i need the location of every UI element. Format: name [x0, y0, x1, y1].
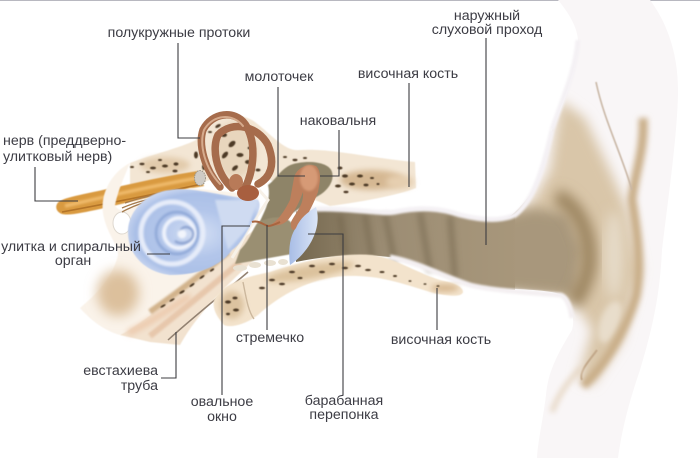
label: external auditory canal: слуховой проход: [432, 22, 543, 38]
tympanic cavity: [232, 162, 333, 271]
Eustachian tube: [120, 225, 278, 345]
label: incus: [300, 113, 376, 176]
label: external auditory canal: наружный: [454, 8, 520, 24]
ear canal: [296, 40, 578, 318]
label: oval window: [191, 226, 253, 425]
label: stapes: стремечко: [236, 330, 304, 346]
label: upper temporal bone: височная кость: [358, 66, 458, 82]
label: nerve: улитковый нерв): [3, 149, 112, 165]
label: cochlea: орган: [55, 253, 91, 269]
label: malleus: молоточек: [245, 69, 314, 85]
label: semicircular canals: [108, 25, 250, 138]
label: cochlea: [1, 239, 170, 269]
semicircular canals: [201, 115, 272, 201]
label: lower temporal bone: [391, 288, 491, 348]
stapes: [252, 221, 280, 226]
label: upper temporal bone: [358, 66, 458, 187]
label: Eustachian tube: труба: [121, 378, 158, 394]
label: lower temporal bone: височная кость: [391, 332, 491, 348]
label: oval window: окно: [207, 409, 237, 425]
lower-left bone mass: [80, 163, 258, 335]
label: oval window: овальное: [191, 394, 253, 410]
nerve (vestibulocochlear): [56, 170, 205, 215]
outer ear (pinna): [512, 0, 678, 458]
nerve fibres fan: [122, 192, 228, 212]
label: tympanic membrane: перепонка: [309, 407, 379, 423]
tympanic membrane: [289, 207, 318, 265]
bone speckle texture: [130, 123, 440, 315]
label: tympanic membrane: барабанная: [305, 393, 383, 409]
cochlea and spiral organ: [128, 189, 260, 275]
label: tympanic membrane: [305, 234, 383, 423]
top edge scan line: [0, 0, 700, 1]
label: nerve: [3, 133, 126, 201]
label: stapes: [236, 225, 304, 346]
label: Eustachian tube: [83, 332, 176, 394]
label: incus: наковальня: [300, 113, 376, 129]
malleus and incus: [270, 165, 320, 230]
label: malleus: [245, 69, 314, 176]
upper temporal bone: [130, 116, 416, 206]
label: external auditory canal: [432, 8, 543, 245]
label: cochlea: улитка и спиральный: [1, 239, 141, 255]
label: Eustachian tube: евстахиева: [83, 363, 158, 379]
lower temporal bone: [214, 254, 463, 326]
label: nerve: нерв (преддверно-: [3, 133, 126, 149]
label: semicircular canals: полукружные протоки: [108, 25, 250, 41]
